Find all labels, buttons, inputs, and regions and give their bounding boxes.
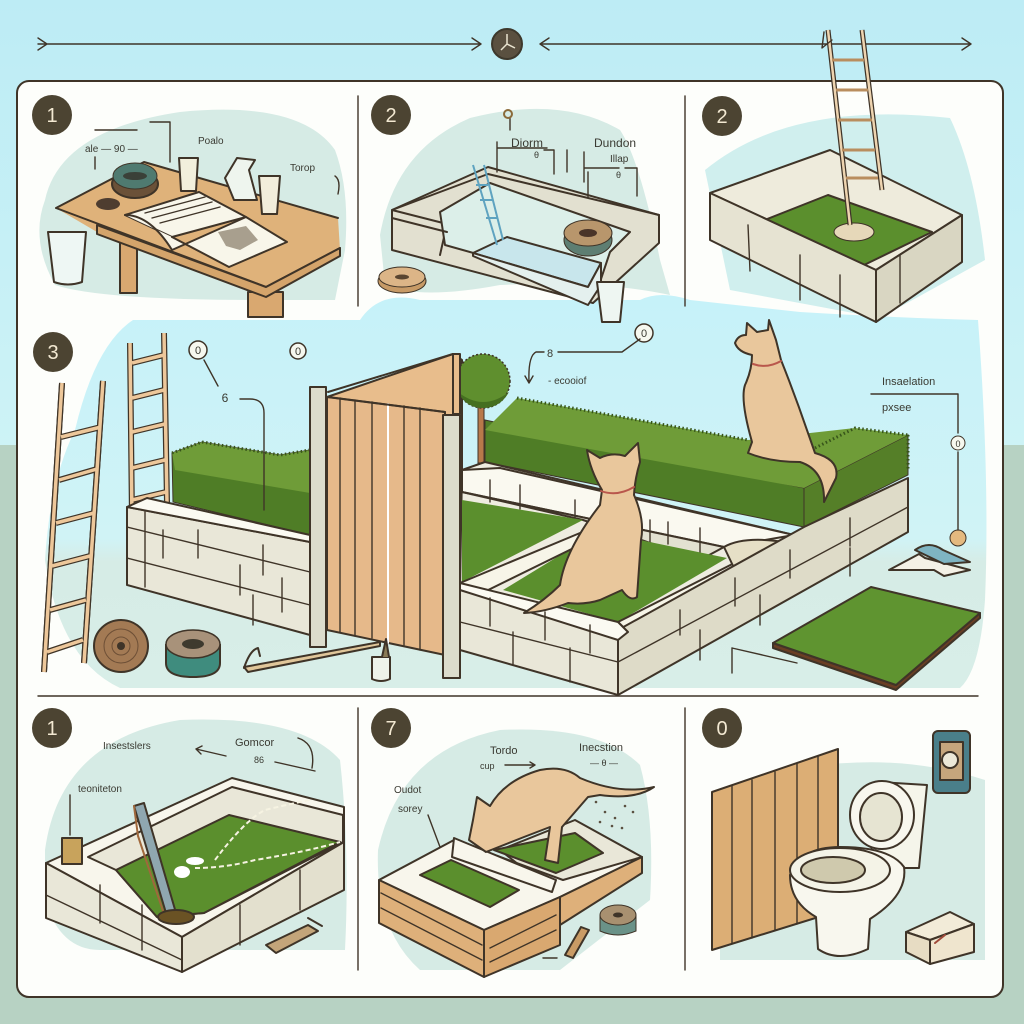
badge 1: 1 [46,105,58,127]
badge 7 [371,708,411,748]
shovel and cup [62,803,194,924]
badge 1b: 1 [46,718,58,740]
basin walls [392,167,659,303]
badge 1b [32,708,72,748]
panel: bottom step 7 [371,708,654,977]
labels [70,737,315,835]
labels: Oudot [394,785,421,796]
rolls and glass [378,220,624,322]
tape and stick [543,905,636,958]
badge 3 [33,332,73,372]
fence back panel [327,354,462,470]
center scene [33,320,980,695]
dog on floor [524,443,642,613]
left ladders [44,333,167,672]
panel: bottom step 0 toilet [702,708,985,964]
annotations right: Insaelation [882,376,935,388]
inner sink [473,237,601,305]
measure and cup [244,639,390,681]
bracket [732,648,797,673]
labels: Insestslers [103,741,151,752]
labels: teoniteton [78,784,122,795]
dog [469,769,654,863]
panel: step 2 basin [371,95,670,322]
top timeline arrow [38,29,971,59]
badge 0 [702,708,742,748]
wall unit [933,731,970,793]
glasses and bottle [48,158,280,284]
badge 2b: 2 [716,106,728,128]
panel dividers [38,96,978,970]
turf patch [773,587,980,690]
panel: step 1 table [32,95,346,317]
fence [310,354,460,678]
labels: Diorm [511,136,543,150]
raised bed [46,778,344,972]
drain disc [834,223,874,241]
annotation left: 0 [295,346,301,358]
ladder [828,30,882,225]
labels [497,110,637,197]
rolls of tape [94,620,220,677]
box [906,912,974,964]
annotations right: pxsee [882,402,911,414]
annotations right: - ecooiof [548,376,587,387]
dog on hedge [735,320,837,502]
white dashes [195,800,340,868]
labels: Dundon [594,136,636,150]
blobs [174,857,204,878]
walled bed [710,150,962,322]
labels [85,122,339,194]
annotations right: 0 [641,328,647,340]
left wall [127,498,310,635]
open book [125,192,287,267]
annotation left: 6 [222,391,229,405]
panel: bottom step 1 [32,708,347,972]
spray dots [595,801,634,829]
right hedge [485,398,908,527]
labels [394,742,623,847]
labels: Torop [290,163,315,174]
labels: cup [480,761,495,771]
front walls [460,478,908,695]
annotations right: 0 [955,439,961,449]
topiary [456,354,510,463]
badge 2b [702,96,742,136]
annotations right [525,324,966,546]
labels: Tordo [490,745,518,757]
floor and back wall [460,462,794,630]
labels: Gomcor [235,737,274,749]
labels: ale — 90 — [85,144,138,155]
tape roll [112,163,158,198]
badge 7: 7 [385,718,397,740]
shears [889,545,970,576]
badge 0: 0 [716,718,728,740]
wood wall [712,749,838,950]
tape strips [460,533,800,632]
central wash [45,295,986,688]
eraser [96,198,120,210]
labels: θ [616,170,621,180]
labels: Inecstion [579,742,623,754]
wood box [379,820,642,977]
blue ladder [473,165,503,245]
clamp tool [266,918,322,953]
labels: Illap [610,154,629,165]
labels: 86 [254,755,264,765]
badge 2 [371,95,411,135]
badge 1 [32,95,72,135]
panel: step 3 wall and ladder [702,30,985,322]
badge 2: 2 [385,105,397,127]
labels: Poalo [198,136,224,147]
annotations right: 8 [547,348,553,360]
annotation left: 0 [195,345,201,357]
left hedge [172,442,310,535]
labels: — θ — [590,758,618,768]
annotation left [189,341,306,510]
labels: θ [534,150,539,160]
toilet [790,781,927,956]
table [56,162,340,317]
badge 3: 3 [47,342,59,364]
labels: sorey [398,804,422,815]
